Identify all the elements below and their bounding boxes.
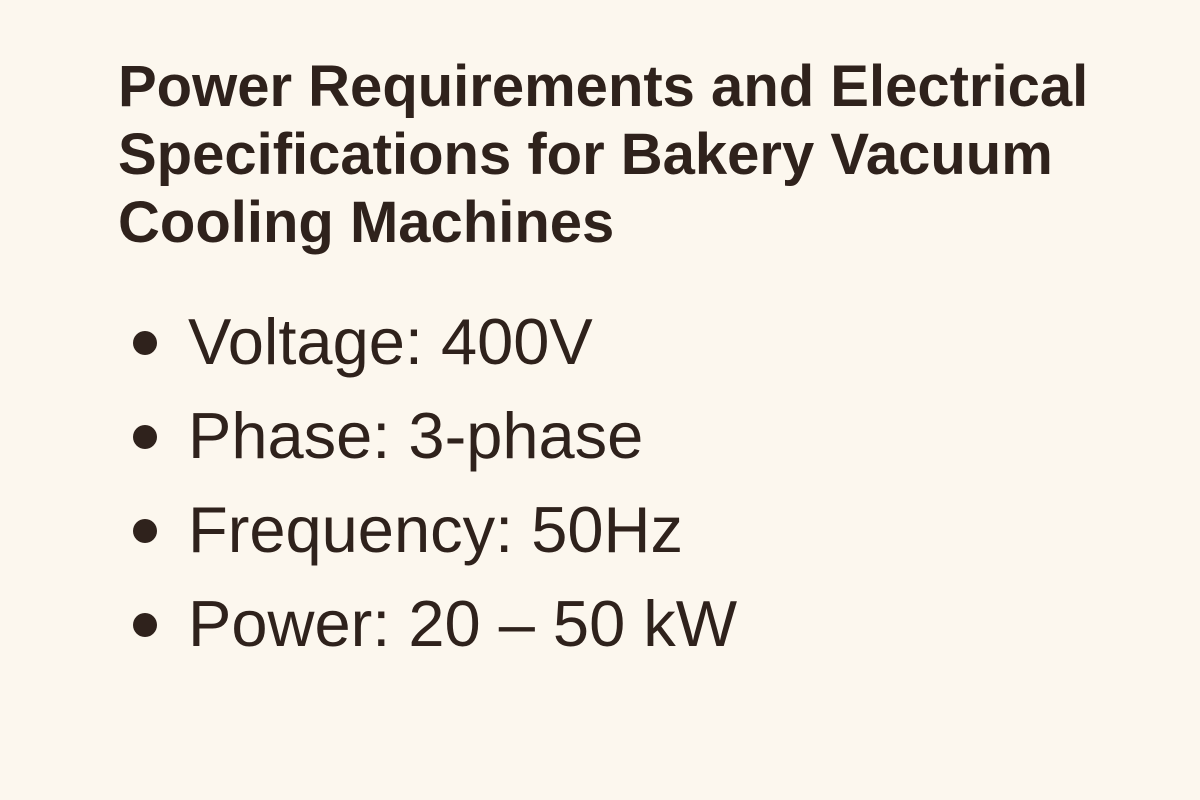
bullet list: specifications bbox=[133, 305, 737, 660]
bullet: power: Power: 20 – 50 kW bbox=[188, 587, 737, 660]
bullet: voltage: Voltage: 400V bbox=[188, 305, 593, 378]
title: Cooling Machines bbox=[118, 190, 614, 255]
title: Power Requirements and Electrical bbox=[118, 54, 1088, 119]
bullet: phase: Phase: 3-phase bbox=[188, 399, 643, 472]
bullet: frequency: Frequency: 50Hz bbox=[188, 493, 683, 566]
title bbox=[118, 54, 1088, 255]
title: Specifications for Bakery Vacuum bbox=[118, 122, 1053, 187]
